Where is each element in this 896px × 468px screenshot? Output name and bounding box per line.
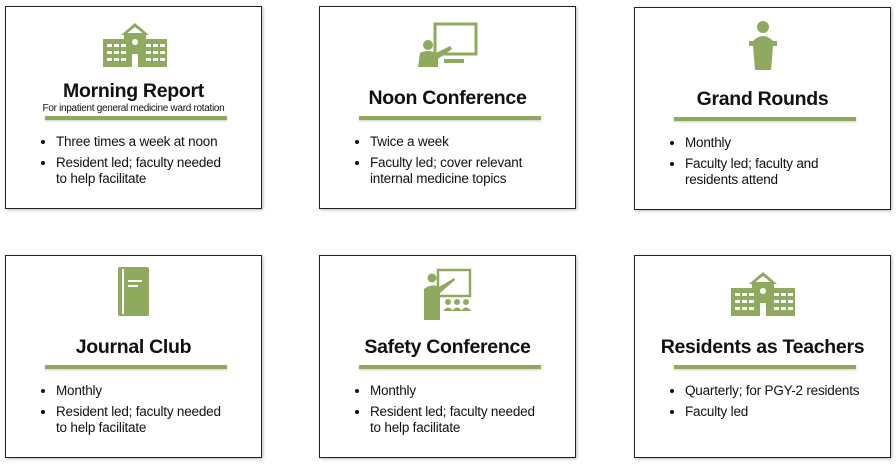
bullets	[355, 383, 535, 435]
bullets: Monthly	[685, 135, 731, 150]
icon: podium	[749, 21, 777, 70]
subtitle: For inpatient general medicine ward rotation	[43, 103, 224, 114]
bullets: Faculty led; faculty and residents attend	[685, 156, 818, 187]
icon: presenter	[418, 22, 478, 67]
bullets	[41, 134, 221, 186]
heading: Grand Rounds	[697, 88, 828, 110]
bullets	[41, 383, 221, 435]
panel: grand rounds	[634, 7, 891, 210]
panel: journal club	[5, 255, 262, 458]
bullets	[670, 135, 818, 187]
bullets: Monthly	[56, 383, 102, 398]
icon: teacher	[424, 268, 472, 320]
heading: Morning Report	[63, 80, 204, 102]
panel: morning report	[5, 6, 262, 209]
panel: residents as teachers	[634, 255, 891, 458]
bullets: Twice a week	[370, 134, 449, 149]
bullets: Faculty led	[685, 404, 748, 419]
panel: noon conference	[319, 6, 576, 209]
heading: Residents as Teachers	[661, 336, 864, 358]
bullets: Three times a week at noon	[56, 134, 217, 149]
bullets: Resident led; faculty needed to help facilitate	[56, 155, 221, 186]
bullets: Quarterly; for PGY-2 residents	[685, 383, 859, 398]
bullets	[670, 383, 859, 419]
heading: Safety Conference	[364, 336, 531, 358]
icon: book	[118, 267, 149, 316]
heading: Noon Conference	[368, 87, 526, 109]
bullets: Resident led; faculty needed to help facilitate	[56, 404, 221, 435]
bullets: Monthly	[370, 383, 416, 398]
heading: Journal Club	[76, 336, 191, 358]
icon: hospital	[103, 23, 167, 67]
bullets	[355, 134, 522, 186]
icon: hospital	[731, 272, 795, 316]
panel: safety conference	[319, 255, 576, 458]
bullets: Faculty led; cover relevant internal medicine topics	[370, 155, 522, 186]
bullets: Resident led; faculty needed to help facilitate	[370, 404, 535, 435]
